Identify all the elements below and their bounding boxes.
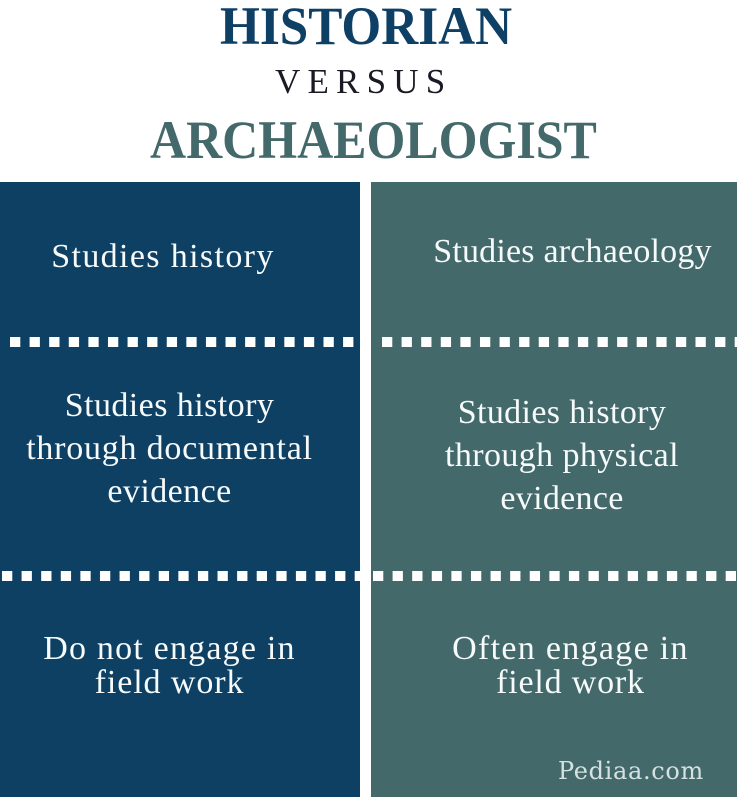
subtitle: versus: VERSUS [275,62,452,101]
text: documental evidence: evidence [107,473,232,510]
divider row 2 right [373,571,737,581]
watermark: Pediaa.com: Pediaa.com [558,757,704,785]
divider row 2 left [2,571,360,581]
panel: historian [0,182,360,797]
text: studies archaeology: Studies archaeology [433,233,712,270]
title: Archaeologist: ARCHAEOLOGIST [150,110,597,170]
text: physical evidence: Studies history [458,394,666,431]
text: no field work [43,630,296,701]
text: no field work: field work [95,664,244,701]
panel: archaeologist [371,182,737,797]
text: often field work: field work [496,664,645,701]
text: often field work: Often engage in [452,630,689,667]
text: physical evidence [445,394,679,517]
text: studies history: Studies history [51,238,275,275]
text: documental evidence: through documental [26,430,313,467]
text: physical evidence: through physical [445,437,679,474]
divider row 1 right [382,337,737,347]
text: documental evidence: Studies history [65,387,274,424]
text: often field work [452,630,689,701]
text: no field work: Do not engage in [43,630,296,667]
divider row 1 left [10,337,360,347]
text: physical evidence: evidence [500,480,624,517]
text: documental evidence [26,387,313,510]
